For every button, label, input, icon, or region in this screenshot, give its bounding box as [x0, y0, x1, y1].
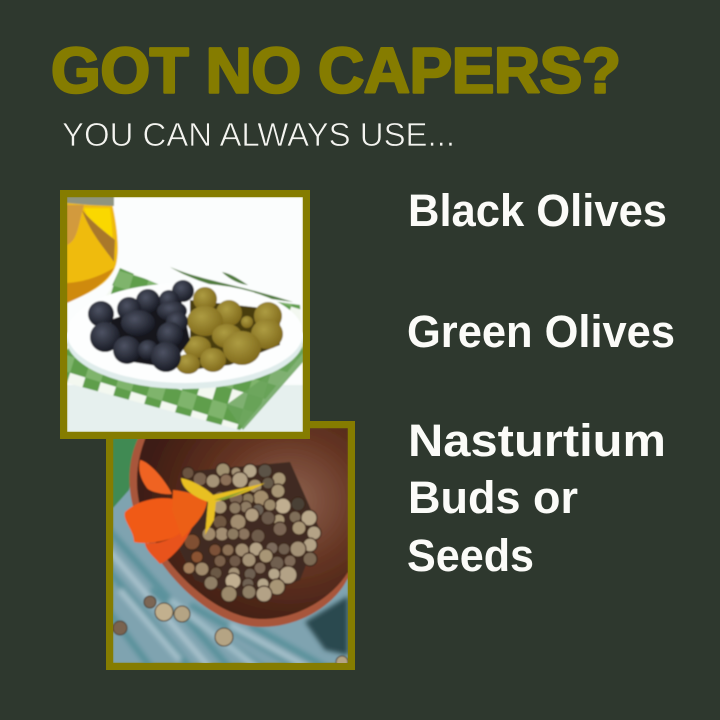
plate: [67, 332, 303, 390]
loose seeds: [113, 596, 348, 668]
leaf: [113, 438, 140, 508]
flower: [125, 460, 265, 564]
label: nasturtium buds or seeds: Buds or: [408, 472, 578, 523]
subtitle: YOU CAN ALWAYS USE...: [62, 116, 455, 153]
olive sprig: [170, 267, 293, 302]
panel: nasturtium seeds photo: [100, 421, 355, 680]
checked cloth: [67, 268, 303, 430]
wood table: [113, 439, 348, 663]
black olives: [88, 280, 194, 372]
green olives: [176, 287, 283, 374]
bowl: [129, 428, 348, 627]
label: nasturtium buds or seeds: Seeds: [407, 530, 534, 581]
panel: olives photo: [60, 190, 310, 439]
label: nasturtium buds or seeds: Nasturtium: [408, 415, 666, 466]
jar of oil: [67, 197, 118, 303]
label: green olives: Green Olives: [407, 306, 675, 357]
label: nasturtium buds or seeds: [407, 415, 666, 581]
seeds: [175, 462, 321, 602]
label: black olives: Black Olives: [408, 185, 667, 236]
title: GOT NO CAPERS?: [51, 34, 621, 106]
